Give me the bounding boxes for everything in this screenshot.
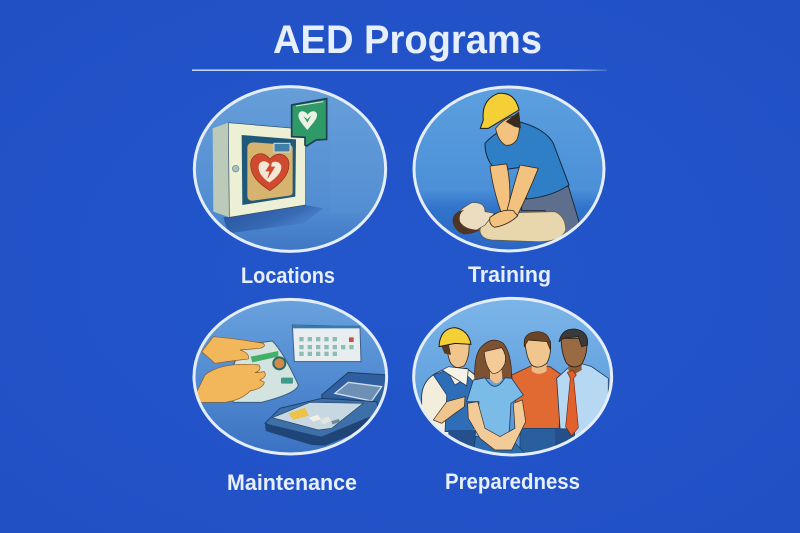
icon: hands servicing AED with calendar and case	[185, 295, 395, 458]
panel: locations	[190, 80, 390, 288]
label: Training: Training	[468, 262, 551, 287]
panel: preparedness	[405, 295, 618, 494]
panel: training	[412, 86, 606, 286]
label: Maintenance: Maintenance	[227, 470, 357, 495]
icon: wall-mounted AED cabinet	[190, 80, 390, 257]
title underline	[192, 70, 607, 71]
label: Locations: Locations	[241, 263, 335, 288]
label: Preparedness: Preparedness	[445, 469, 580, 494]
panel: maintenance	[192, 298, 388, 490]
title: AED Programs	[273, 18, 542, 62]
icon: group of four people	[405, 295, 618, 458]
icon: worker doing CPR on manikin	[412, 86, 606, 252]
